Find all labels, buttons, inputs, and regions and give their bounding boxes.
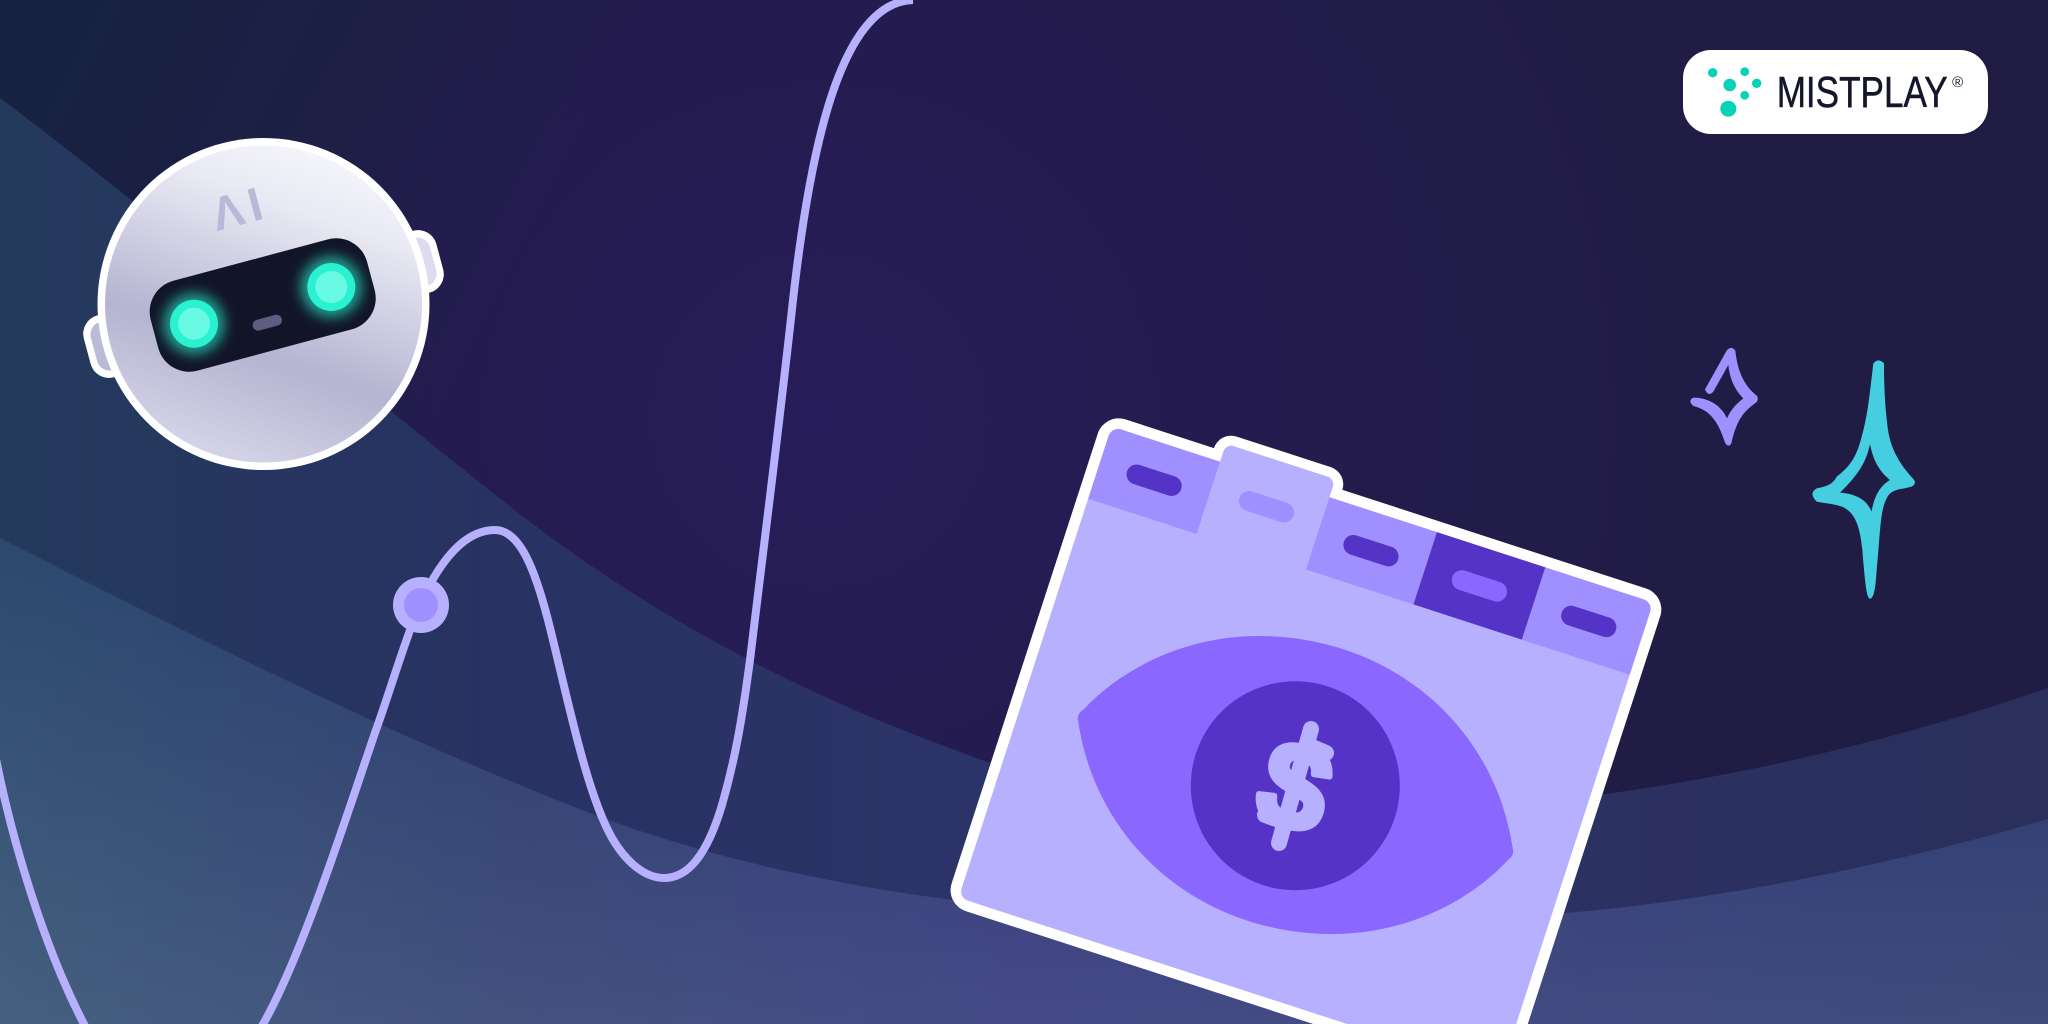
tab: first: [1088, 426, 1220, 534]
left eye: [163, 293, 225, 355]
AI label: ΛI: [206, 175, 274, 241]
squiggle line with node: [0, 0, 913, 1024]
logo badge: [1683, 50, 1988, 134]
robot mouth: [251, 314, 283, 332]
sparkle: small purple: [1690, 348, 1758, 446]
eye shape: [1078, 636, 1513, 934]
sparkle: large cyan: [1812, 360, 1915, 599]
tab: active: [1197, 444, 1335, 570]
tab: last: [1522, 567, 1653, 675]
node on line: [393, 577, 449, 633]
logo dots: [1708, 67, 1761, 117]
dollar sign: $: [1243, 712, 1347, 862]
tab pills: [1124, 453, 1622, 640]
Mistplay logo: [1683, 50, 1988, 134]
ad card with tabs and eye: [945, 395, 1673, 1024]
eye iris: [1191, 681, 1400, 890]
robot head sphere: [98, 138, 430, 470]
card body: [945, 395, 1673, 1024]
tab: dark: [1413, 532, 1545, 640]
right eye: [300, 256, 362, 318]
AI robot head: [79, 138, 448, 470]
tab: third: [1306, 497, 1437, 604]
registered mark: ®: [1952, 74, 1963, 91]
background wave: front layer: [0, 538, 2048, 1024]
logo wordmark: MISTPLAY: [1777, 68, 1948, 117]
robot visor: [142, 231, 383, 379]
robot ears: [79, 226, 448, 382]
